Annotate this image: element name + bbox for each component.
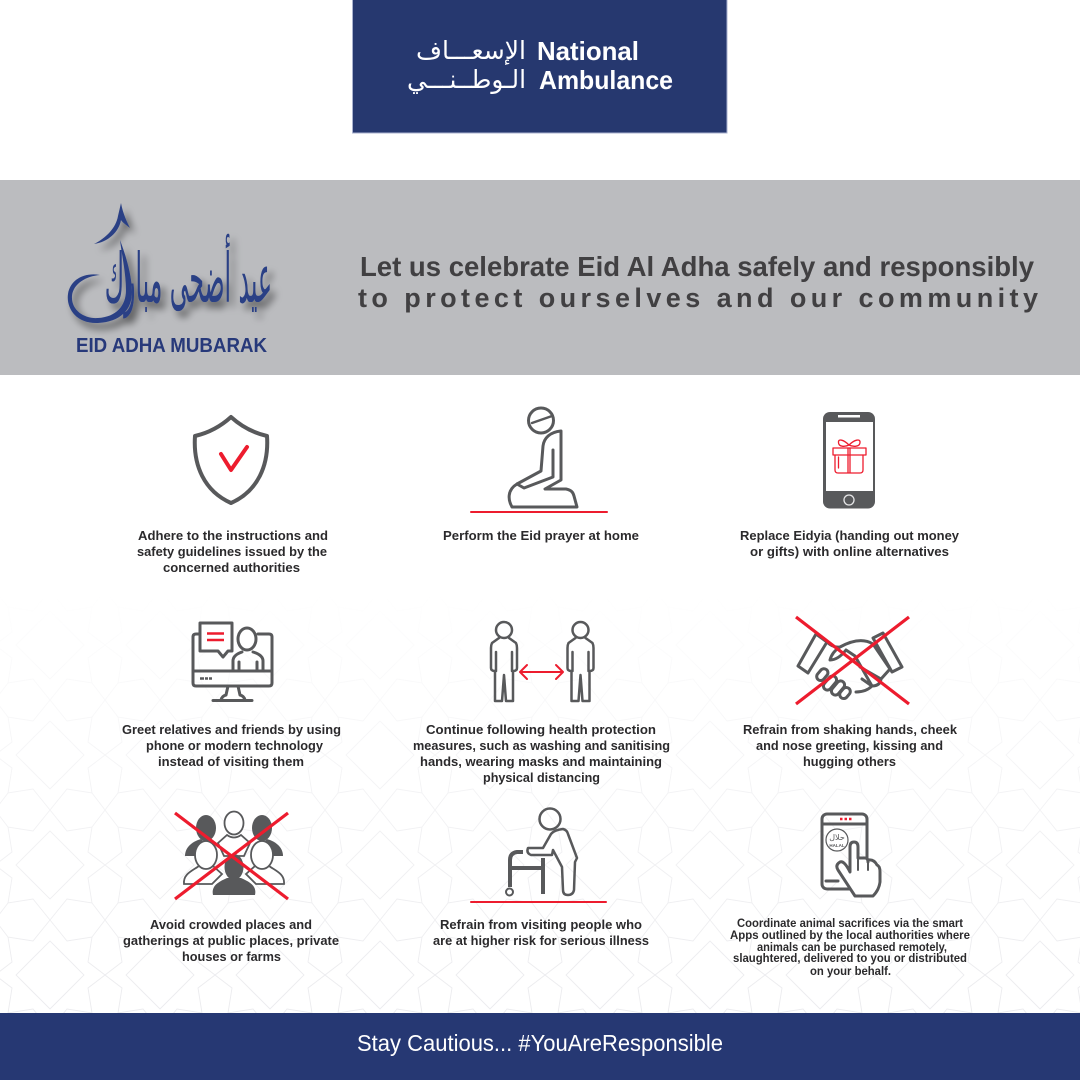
text: avoid crowds [123, 917, 339, 964]
text: protect high risk people: Refrain from visiting people who [440, 917, 642, 932]
logo text: Arabic first line: الإسعـــاف [416, 36, 526, 65]
text: follow guidelines: concerned authorities [163, 560, 300, 575]
item: pray at home [443, 408, 639, 543]
text: avoid crowds: Avoid crowded places and [150, 917, 312, 932]
icon: computer with video call [193, 623, 272, 700]
icon: phone with halal badge and pointing hand [822, 814, 880, 896]
text: follow guidelines [137, 528, 328, 575]
icon: crossed out crowd [175, 812, 288, 899]
item: greet remotely [122, 623, 341, 769]
item: no handshakes [743, 617, 958, 769]
logo text: National: National [537, 36, 639, 66]
Arabic calligraphy greeting [68, 203, 272, 323]
icon: kneeling person praying [471, 408, 607, 512]
headline line one: Let us celebrate Eid Al Adha safely and responsibly [360, 251, 1034, 282]
icon: elderly person with walker [471, 808, 606, 902]
text: physical distancing: physical distancing [483, 770, 600, 785]
item: physical distancing [413, 622, 670, 785]
logo text: Arabic second line: الـوطــنـــي [407, 65, 526, 94]
banner panel [0, 180, 1080, 375]
icon: two people with distance arrow [491, 622, 594, 701]
text: no handshakes: hugging others [803, 754, 896, 769]
text: no handshakes [743, 722, 958, 769]
text: physical distancing: hands, wearing masks and maintaining [420, 754, 662, 769]
text: pray at home: Perform the Eid prayer at home [443, 528, 639, 543]
item: avoid crowds [123, 812, 339, 964]
logo panel: National Ambulance [352, 0, 727, 133]
text: physical distancing: measures, such as washing and sanitising [413, 738, 670, 753]
item: follow guidelines [137, 417, 328, 575]
text: no handshakes: Refrain from shaking hands, cheek [743, 722, 958, 737]
footer bar [0, 1013, 1080, 1080]
text: protect high risk people [433, 917, 649, 948]
text: avoid crowds: houses or farms [182, 949, 281, 964]
badge: halal [826, 829, 848, 851]
text: protect high risk people: are at higher risk for serious illness [433, 933, 649, 948]
badge: halal: HALAL [829, 843, 845, 848]
item: online Eidyia [740, 412, 960, 559]
headline line two: to protect ourselves and our community [358, 283, 1038, 313]
text: halal sacrifice apps [730, 918, 970, 978]
text: halal sacrifice apps: animals can be purchased remotely, [757, 942, 947, 954]
text: follow guidelines: safety guidelines issued by the [137, 544, 327, 559]
badge: halal: حلال [829, 833, 845, 842]
text: no handshakes: and nose greeting, kissing and [756, 738, 943, 753]
text: avoid crowds: gatherings at public places, private [123, 933, 339, 948]
logo text: Ambulance: Ambulance [539, 65, 673, 95]
icon: crossed out handshake [796, 617, 909, 704]
icon: shield with check [195, 417, 267, 503]
text: greet remotely: Greet relatives and friends by using [122, 722, 341, 737]
text: online Eidyia: Replace Eidyia (handing out money [740, 528, 960, 543]
icon: phone with gift [823, 412, 875, 508]
footer slogan: Stay Cautious... #YouAreResponsible [357, 1030, 723, 1056]
item: halal sacrifice apps [730, 814, 970, 978]
text: greet remotely: instead of visiting them [158, 754, 304, 769]
text: online Eidyia: or gifts) with online alternatives [750, 544, 949, 559]
text: follow guidelines: Adhere to the instructions and [138, 528, 328, 543]
text: greet remotely [122, 722, 341, 769]
text: online Eidyia [740, 528, 960, 559]
text: halal sacrifice apps: slaughtered, delivered to you or distributed [733, 953, 967, 965]
text: halal sacrifice apps: on your behalf. [810, 966, 891, 978]
item: protect high risk people [433, 808, 649, 948]
text: physical distancing [413, 722, 670, 785]
text: physical distancing: Continue following health protection [426, 722, 656, 737]
text: halal sacrifice apps: Coordinate animal sacrifices via the smart [737, 918, 963, 930]
text: halal sacrifice apps: Apps outlined by the local authorities where [730, 930, 970, 942]
text: greet remotely: phone or modern technology [146, 738, 324, 753]
caption: EID ADHA MUBARAK: EID ADHA MUBARAK [76, 335, 268, 357]
Arabic calligraphy greeting: عيد أضحى مبارك [105, 233, 272, 318]
